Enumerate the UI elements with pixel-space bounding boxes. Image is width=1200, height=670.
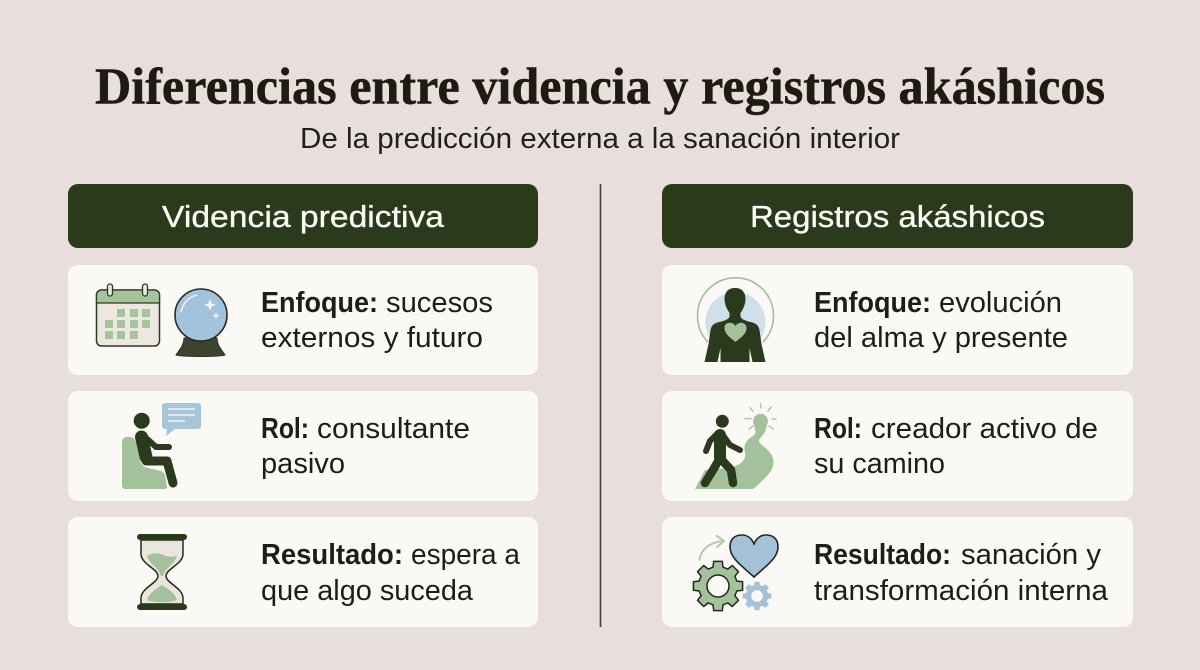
text: resultado: que algo suceda (261, 575, 473, 607)
text: resultado: sanación y (961, 539, 1102, 571)
card: resultado akáshico (662, 517, 1133, 627)
icon: hourglass (137, 534, 187, 610)
card: enfoque predictivo (68, 265, 538, 375)
text: resultado: espera a (411, 539, 520, 571)
text: rol (261, 413, 470, 480)
panel: videncia predictiva (68, 184, 538, 627)
icon: body with heart and halo (698, 278, 774, 362)
text: rol: Rol: (814, 413, 862, 445)
subtitle: De la predicción externa a la sanación interior (300, 123, 901, 155)
title: Diferencias entre videncia y registros akáshicos (95, 58, 1105, 116)
icon: seated person with speech bubble (122, 403, 201, 489)
text: enfoque: Enfoque: (261, 287, 378, 319)
text: enfoque: evolución (939, 287, 1062, 319)
text: enfoque (814, 287, 1068, 354)
text: resultado: transformación interna (814, 575, 1108, 607)
heading: videncia predictiva: Videncia predictiva (162, 199, 445, 234)
text: resultado: Resultado: (814, 539, 951, 571)
text: resultado (261, 539, 520, 607)
heading: registros akáshicos: Registros akáshicos (750, 199, 1045, 234)
text: enfoque: Enfoque: (814, 287, 931, 319)
card: rol akáshico (662, 391, 1133, 501)
text: resultado: Resultado: (261, 539, 403, 571)
text: rol: creador activo de (871, 413, 1098, 445)
panel: registros akáshicos (662, 184, 1133, 627)
heading: videncia predictiva (68, 184, 538, 248)
text: resultado (814, 539, 1108, 607)
card: rol predictivo (68, 391, 538, 501)
card: enfoque akáshico (662, 265, 1133, 375)
heading: registros akáshicos (662, 184, 1133, 248)
card: resultado predictivo (68, 517, 538, 627)
icon: heart, gears and arrow (693, 535, 778, 611)
text: enfoque: del alma y presente (814, 322, 1068, 354)
icon: calendar (96, 284, 160, 346)
text: enfoque (261, 287, 493, 354)
text: enfoque: sucesos (386, 287, 493, 319)
icon: walker on path towards light bulb (695, 404, 776, 489)
text: rol (814, 413, 1098, 480)
text: rol: su camino (814, 448, 945, 480)
icon: crystal ball (175, 289, 227, 356)
text: enfoque: externos y futuro (261, 322, 483, 354)
text: rol: consultante (317, 413, 470, 445)
text: rol: pasivo (261, 448, 345, 480)
text: rol: Rol: (261, 413, 309, 445)
